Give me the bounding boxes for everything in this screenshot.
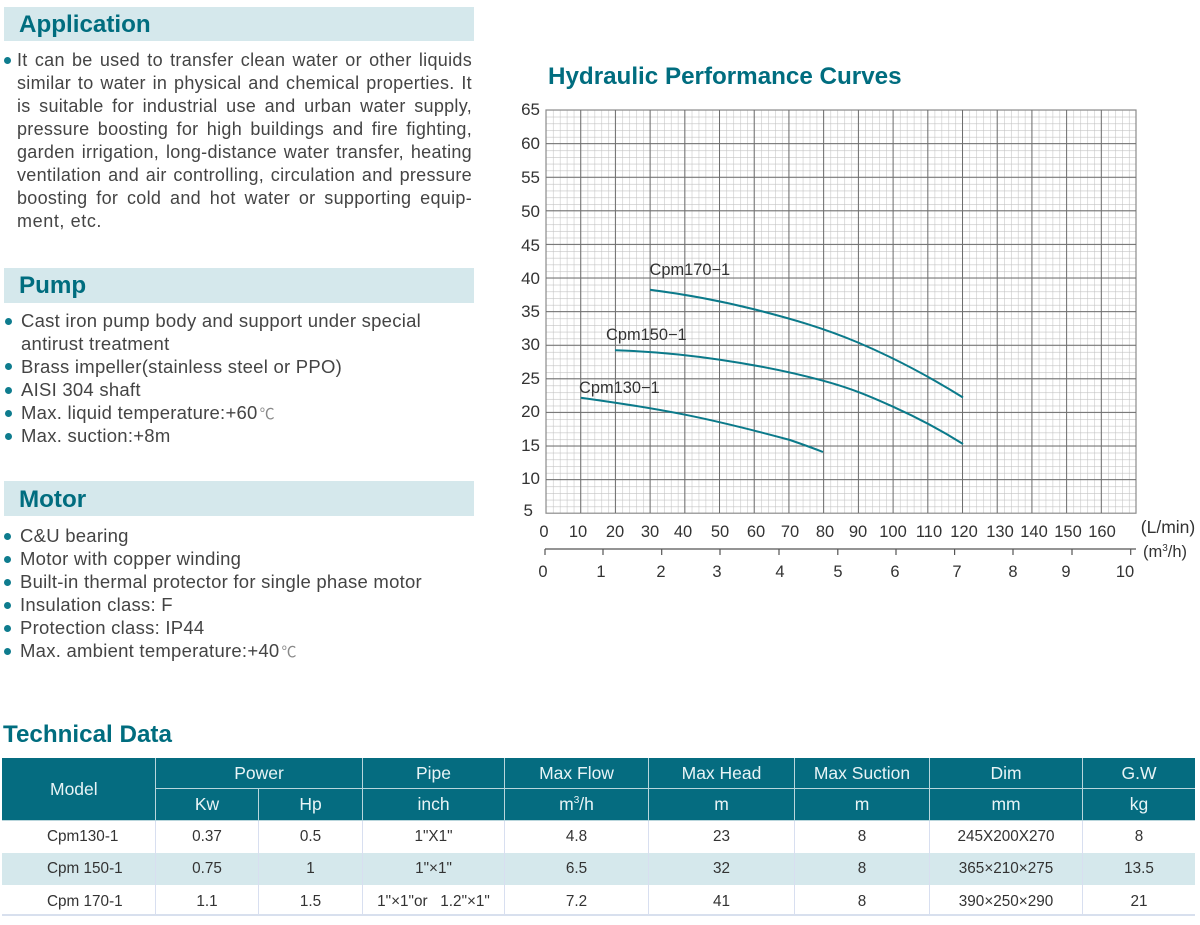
heading: technical data: Technical Data xyxy=(3,721,172,748)
x axis labels: L/min: 140 xyxy=(1020,523,1048,541)
y axis labels: 25 xyxy=(521,369,540,388)
curve: Cpm150-1 xyxy=(606,326,963,444)
table: technical data: 8 xyxy=(858,892,866,910)
text block: motor features: Protection class: IP44 xyxy=(20,617,204,638)
text block: application description: garden irrigation, long-distance water transfer, heating xyxy=(17,142,472,162)
table: technical data: 8 xyxy=(1135,828,1143,845)
x axis: m3/h scale: 7 xyxy=(952,563,962,581)
table: technical data: 245X200X270 xyxy=(958,828,1054,845)
text block: pump features: Max. suction:+8m xyxy=(21,425,170,446)
table: technical data: Hp xyxy=(299,794,322,814)
table: technical data: Cpm130-1 xyxy=(47,828,118,845)
table: technical data: 1 xyxy=(306,860,315,877)
table: technical data: Max Flow xyxy=(539,762,614,782)
text block: application description: pressure boosting for high buildings and fire fighting, xyxy=(17,119,472,139)
text block: motor features: Insulation class: F xyxy=(20,594,173,615)
table: technical data: mm xyxy=(991,794,1021,814)
heading: hydraulic performance curves: Hydraulic Performance Curves xyxy=(548,63,902,90)
table: technical data: 41 xyxy=(713,892,730,910)
table: technical data: 8 xyxy=(858,860,866,877)
text block: application description xyxy=(4,50,472,231)
x axis labels: L/min: 150 xyxy=(1054,523,1082,541)
table: technical data: Power xyxy=(234,762,284,782)
panel: pump heading: Pump xyxy=(19,272,86,298)
x axis labels: L/min: 100 xyxy=(879,523,907,541)
chart grid xyxy=(546,110,1136,513)
text block: motor features: C&U bearing xyxy=(20,525,129,546)
table: technical data: 1.1 xyxy=(196,892,218,910)
table: technical data: 1"×1" xyxy=(415,860,452,877)
text block: motor features: Motor with copper winding xyxy=(20,548,241,569)
text block: motor features xyxy=(4,525,422,661)
table: technical data: 32 xyxy=(713,860,730,877)
panel: application heading: Application xyxy=(19,11,151,38)
y axis labels xyxy=(521,100,540,520)
curve: Cpm170-1: Cpm170−1 xyxy=(650,261,730,279)
y axis labels: 45 xyxy=(521,236,540,255)
x axis labels: L/min: 160 xyxy=(1088,523,1116,541)
table: technical data: 4.8 xyxy=(566,828,587,845)
table: technical data: Cpm 170-1 xyxy=(47,892,123,910)
table: technical data: 1"×1"or 1.2"×1" xyxy=(377,892,490,910)
y axis labels: 30 xyxy=(521,335,540,354)
x axis labels: L/min: 80 xyxy=(816,523,834,541)
curve: Cpm130-1: Cpm130−1 xyxy=(579,379,660,397)
table: technical data: m xyxy=(714,794,729,814)
text block: motor features: Max. ambient temperature:+40℃ xyxy=(20,640,296,661)
text block: application description: ventilation and air controlling, circulation and pressure xyxy=(17,165,472,185)
panel: pump heading xyxy=(4,268,474,303)
table: technical data: inch xyxy=(417,794,450,814)
x axis labels: L/min: (L/min) xyxy=(1141,517,1195,537)
table: technical data: 13.5 xyxy=(1124,860,1154,877)
x axis: m3/h scale: 8 xyxy=(1008,563,1018,581)
table: technical data: G.W xyxy=(1122,762,1157,782)
table: technical data: 0.37 xyxy=(192,828,222,845)
table: technical data: Model xyxy=(50,778,98,798)
panel: application heading xyxy=(4,7,474,41)
table: technical data: 7.2 xyxy=(566,892,587,910)
text block: application description: boosting for cold and hot water or supporting equip- xyxy=(17,188,472,208)
x axis: m3/h scale: 9 xyxy=(1061,563,1071,581)
table: technical data: Max Head xyxy=(682,762,761,782)
x axis labels: L/min: 0 xyxy=(539,523,549,541)
table: technical data: Max Suction xyxy=(814,762,910,782)
text block: application description: It can be used to transfer clean water or other liquids xyxy=(17,50,472,70)
panel: motor heading: Motor xyxy=(19,486,86,512)
x axis: m3/h scale: /h) xyxy=(1168,543,1187,561)
table: technical data: 8 xyxy=(858,828,866,845)
x axis labels: L/min: 130 xyxy=(986,523,1014,541)
panel: motor heading xyxy=(4,481,474,516)
x axis: m3/h scale xyxy=(538,543,1187,581)
table: technical data: 6.5 xyxy=(566,860,587,877)
curve: Cpm130-1 xyxy=(579,379,823,452)
table: technical data: 390×250×290 xyxy=(959,892,1053,910)
y axis labels: 5 xyxy=(524,501,533,520)
text block: pump features: Brass impeller(stainless steel or PPO) xyxy=(21,356,342,377)
table: technical data: 21 xyxy=(1130,892,1148,910)
x axis: m3/h scale: 5 xyxy=(833,563,843,581)
table: technical data: Pipe xyxy=(416,762,451,782)
curve: Cpm150-1: Cpm150−1 xyxy=(606,326,687,344)
table: technical data: m3/h xyxy=(559,794,594,814)
table: technical data: m xyxy=(855,794,869,814)
x axis: m3/h scale: (m xyxy=(1143,543,1162,561)
table: technical data: kg xyxy=(1130,794,1148,814)
text block: application description: is suitable for industrial use and urban water supply, xyxy=(17,96,472,116)
table: technical data: 1"X1" xyxy=(414,828,453,845)
text block: pump features: Cast iron pump body and support under special xyxy=(21,310,421,331)
x axis: m3/h scale: 3 xyxy=(1162,543,1168,554)
x axis labels: L/min: 30 xyxy=(641,523,659,541)
x axis: m3/h scale: 0 xyxy=(538,563,548,581)
y axis labels: 40 xyxy=(521,269,540,288)
table: technical data: Cpm 150-1 xyxy=(47,860,123,877)
x axis labels: L/min: 120 xyxy=(950,523,978,541)
table: technical data: Dim xyxy=(990,762,1022,782)
x axis: m3/h scale: 10 xyxy=(1116,563,1134,581)
x axis labels: L/min: 10 xyxy=(569,523,587,541)
table: technical data: Kw xyxy=(195,794,219,814)
x axis: m3/h scale: 3 xyxy=(712,563,722,581)
text block: pump features: AISI 304 shaft xyxy=(21,379,141,400)
x axis: m3/h scale: 6 xyxy=(890,563,900,581)
y axis labels: 65 xyxy=(521,100,540,119)
text block: pump features: Max. liquid temperature:+60℃ xyxy=(21,402,275,423)
y axis labels: 10 xyxy=(521,469,540,488)
table: technical data xyxy=(2,758,1195,916)
text block: pump features: antirust treatment xyxy=(21,333,169,354)
text block: pump features xyxy=(5,310,421,446)
y axis labels: 60 xyxy=(521,134,540,153)
y axis labels: 15 xyxy=(521,436,540,455)
y axis labels: 20 xyxy=(521,402,540,421)
y axis labels: 55 xyxy=(521,168,540,187)
table: technical data: 1.5 xyxy=(300,892,321,910)
x axis labels: L/min: 90 xyxy=(849,523,867,541)
x axis: m3/h scale: 2 xyxy=(656,563,666,581)
text block: application description: similar to water in physical and chemical properties. It xyxy=(17,73,472,93)
table: technical data: 365×210×275 xyxy=(959,860,1053,877)
y axis labels: 35 xyxy=(521,302,540,321)
table: technical data: 0.5 xyxy=(300,828,321,845)
x axis labels: L/min: 60 xyxy=(747,523,765,541)
x axis labels: L/min: 110 xyxy=(916,523,942,541)
x axis: m3/h scale: 1 xyxy=(596,563,606,581)
curve: Cpm170-1 xyxy=(650,261,963,398)
x axis labels: L/min: 40 xyxy=(674,523,692,541)
table: technical data: 0.75 xyxy=(192,860,222,877)
x axis labels: L/min: 50 xyxy=(711,523,729,541)
text block: application description: ment, etc. xyxy=(17,211,102,231)
table: technical data: 23 xyxy=(713,828,730,845)
x axis labels: L/min xyxy=(539,517,1195,541)
x axis labels: L/min: 20 xyxy=(606,523,624,541)
y axis labels: 50 xyxy=(521,202,540,221)
x axis labels: L/min: 70 xyxy=(781,523,799,541)
x axis: m3/h scale: 4 xyxy=(775,563,785,581)
text block: motor features: Built-in thermal protector for single phase motor xyxy=(20,571,422,592)
